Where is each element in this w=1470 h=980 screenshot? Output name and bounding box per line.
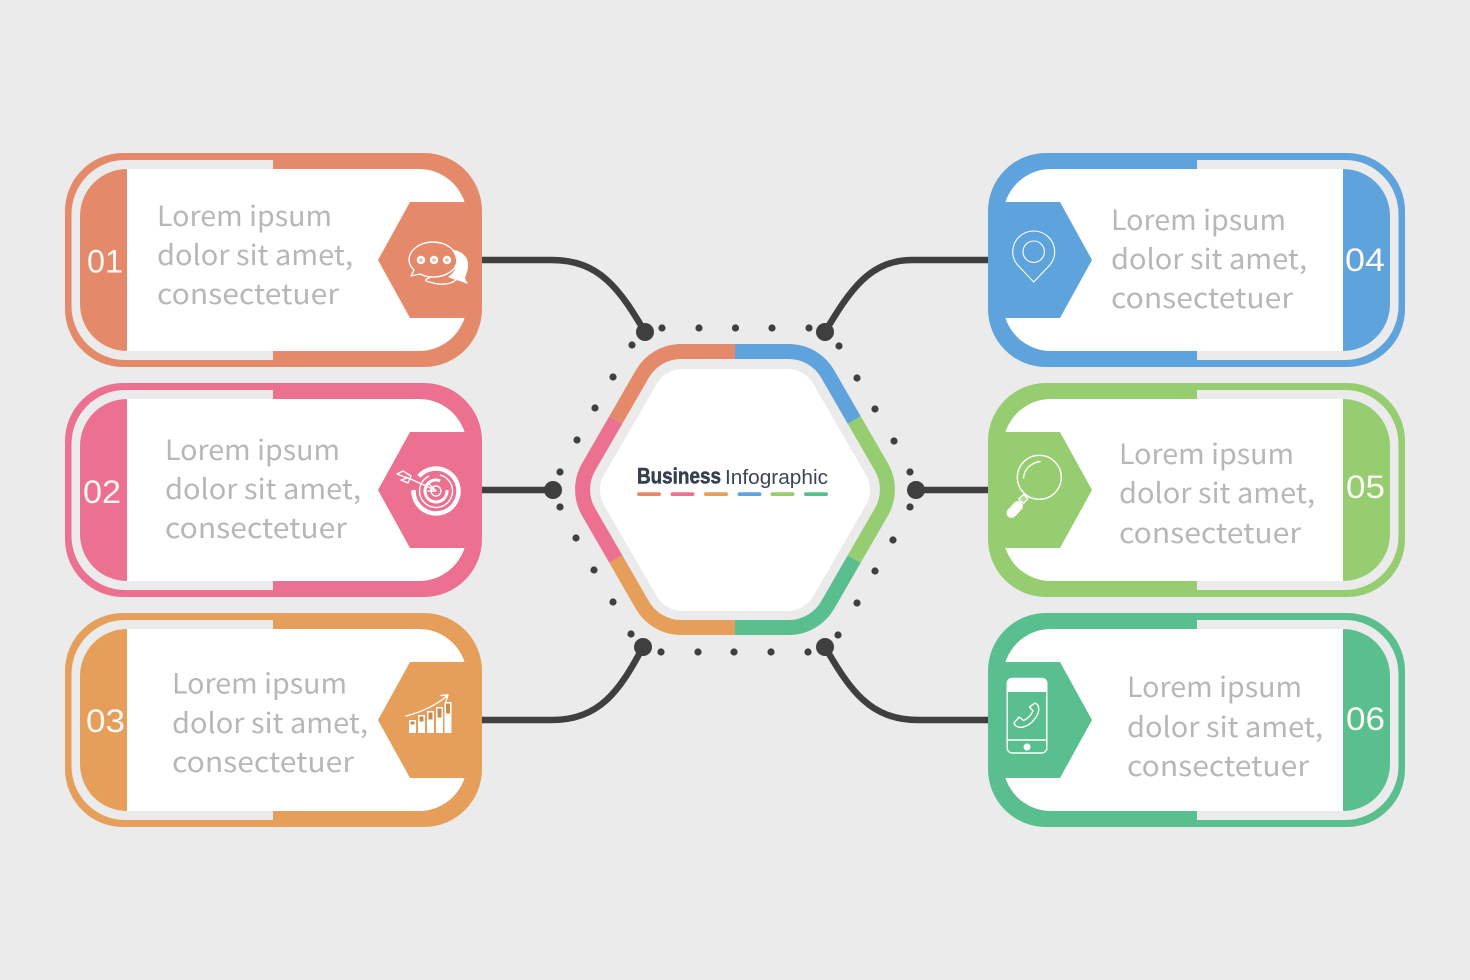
panel: card 01 [65,153,482,367]
panel: card 05 [988,383,1405,597]
icon: map pin [1013,231,1055,282]
text block: consectetuer [1127,745,1309,785]
text block: dolor sit amet, [1127,706,1323,746]
icon: smartphone with handset [1007,678,1047,753]
number 05: 05 [1346,469,1385,505]
text block: dolor sit amet, [1111,238,1307,278]
text block [165,429,361,547]
number 04: 04 [1345,242,1385,278]
text block: consectetuer [165,507,347,547]
connector: 04 [825,260,988,332]
connector: 02 [482,487,553,493]
icon: chat bubbles [409,242,468,284]
number 01: 01 [87,244,123,280]
connector: 05 [916,487,988,493]
text block: Lorem ipsum [157,195,332,235]
text block [1111,199,1307,317]
connector: 01 [482,260,645,332]
text block: Lorem ipsum [172,662,347,702]
panel: card 04 [988,153,1405,367]
text block: dolor sit amet, [1119,472,1315,512]
text block: Lorem ipsum [1119,433,1294,473]
text block [172,662,368,781]
card frame [988,613,1405,827]
text block: consectetuer [1119,512,1301,552]
panel: card 06 [988,613,1405,827]
text block: dolor sit amet, [172,702,368,742]
text block: Lorem ipsum [1127,666,1302,706]
icon: target with arrow [397,460,467,522]
text block: dolor sit amet, [165,468,361,508]
card frame [65,383,482,597]
text block [1119,433,1315,552]
text block: Lorem ipsum [165,429,340,469]
title dashes [637,492,828,496]
text block: dolor sit amet, [157,234,353,274]
text block: Lorem ipsum [1111,199,1286,239]
icon: rising bar chart [406,695,452,733]
number 06: 06 [1346,701,1385,737]
center title: Infographic [725,466,828,489]
hexagon ring [583,351,887,628]
dotted ring around hexagon [556,324,914,656]
text block [1127,666,1323,785]
panel: card 03 [65,613,482,827]
icon: magnifying glass [1012,455,1061,513]
connector: 03 [482,647,643,720]
text block [157,195,353,313]
center title [637,464,828,489]
panel: card 02 [65,383,482,597]
text block: consectetuer [1111,277,1293,317]
connector end dots [544,323,925,656]
number 03: 03 [86,703,125,739]
text block: consectetuer [157,273,339,313]
center title: Business [637,464,721,488]
card frame [65,613,482,827]
number 02: 02 [83,474,121,510]
center hexagon [583,351,887,628]
hexagon white core [600,369,870,611]
text block: consectetuer [172,741,354,781]
card frame [988,383,1405,597]
card frame [988,153,1405,367]
card frame [65,153,482,367]
connector: 06 [825,647,988,720]
